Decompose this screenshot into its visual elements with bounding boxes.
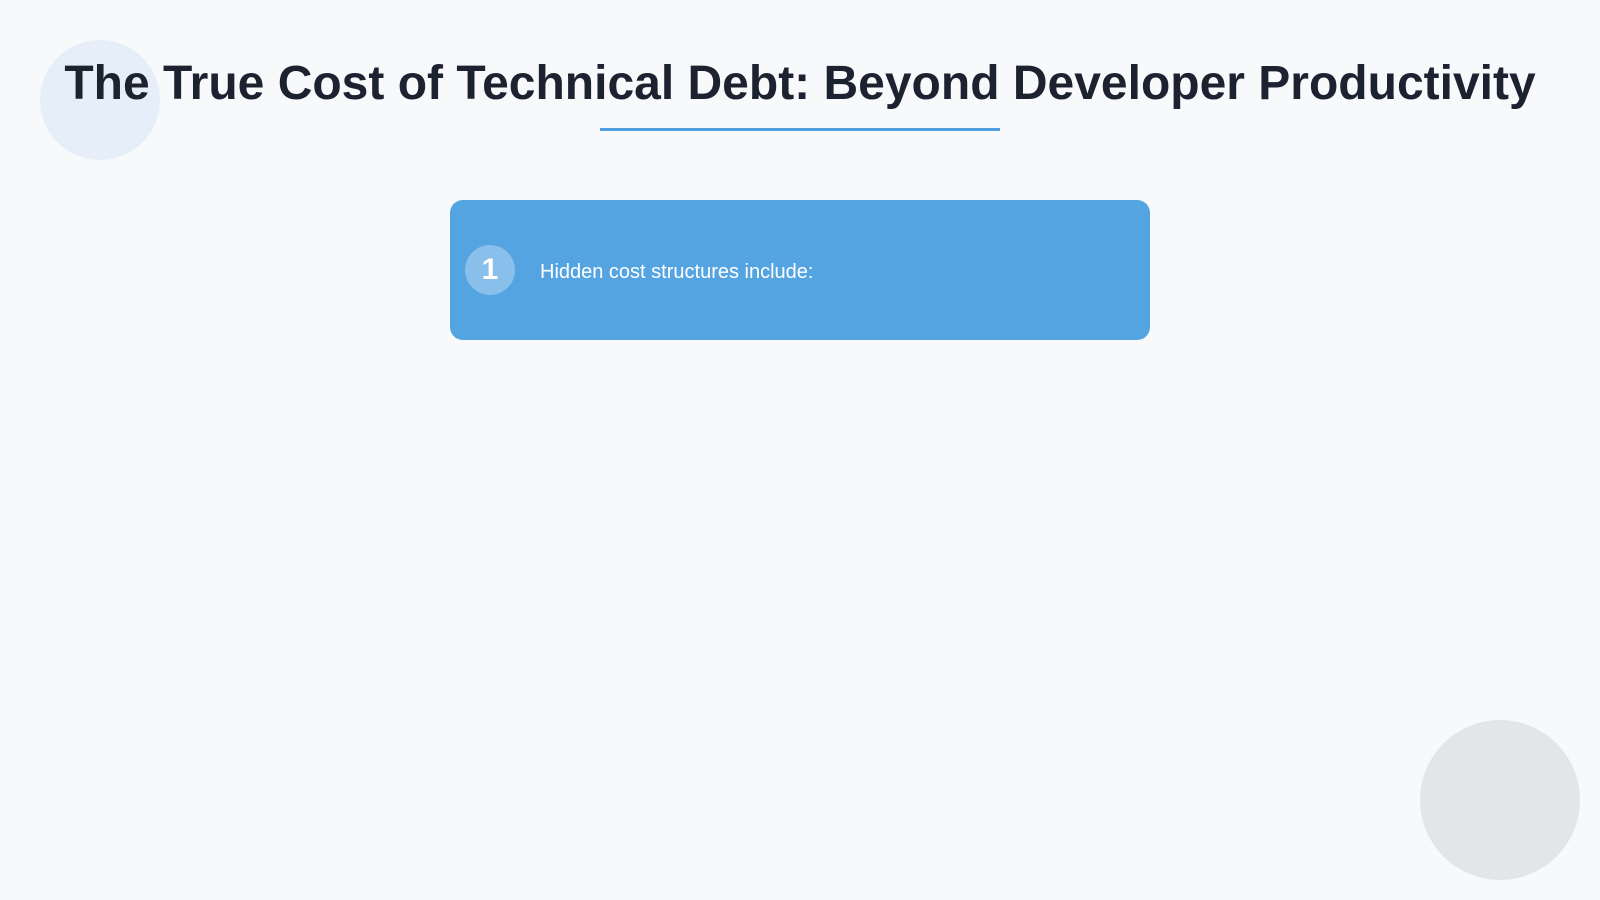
step number badge bbox=[465, 245, 515, 295]
title: The True Cost of Technical Debt: Beyond Developer Productivity bbox=[64, 57, 1536, 110]
card: hidden cost structures bbox=[450, 200, 1150, 340]
step number badge: 1 bbox=[482, 253, 498, 286]
title underline bbox=[600, 128, 1000, 131]
card text: Hidden cost structures include: bbox=[540, 261, 813, 283]
decorative circle top-left bbox=[40, 40, 160, 160]
decorative circle bottom-right bbox=[1420, 720, 1580, 880]
